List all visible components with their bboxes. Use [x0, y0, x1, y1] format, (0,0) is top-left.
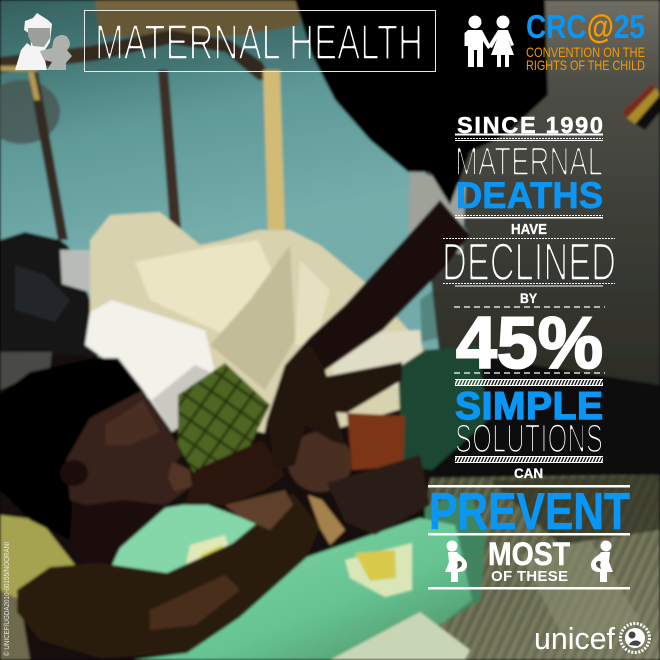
title box — [84, 10, 436, 72]
CRC@25 logo text: CRC@25 — [526, 8, 645, 45]
base shadow under lower scene — [0, 350, 660, 660]
icon: pregnant woman right — [591, 540, 613, 582]
icon: pregnant woman left — [445, 540, 467, 582]
title: Maternal Health: MATERNAL HEALTH — [95, 16, 423, 70]
deaths: DEATHS — [456, 175, 603, 216]
of these: OF THESE — [491, 568, 568, 585]
can: CAN — [514, 465, 543, 481]
bag — [0, 232, 100, 400]
baby and hands — [288, 432, 352, 492]
striped sheet — [300, 475, 660, 660]
linen — [90, 212, 430, 440]
unicef wordmark: unicef — [534, 621, 615, 656]
have: HAVE — [511, 221, 547, 238]
icon: mother holding baby — [15, 13, 72, 70]
most: MOST — [488, 536, 570, 572]
icon: boy and girl holding hands — [464, 16, 514, 67]
headline text column — [428, 112, 630, 590]
simple: SIMPLE — [455, 385, 603, 428]
45 percent: 45% — [456, 303, 603, 384]
nurse head — [295, 0, 548, 205]
mother — [60, 495, 180, 572]
since 1990: SINCE 1990 — [457, 112, 603, 138]
photo credit: © UNICEF/UGDA2010-00155/NOORANI — [3, 542, 11, 656]
CRC@25 logo text — [526, 8, 645, 73]
towel and checked cloth — [178, 363, 270, 475]
icon: unicef emblem — [620, 624, 650, 652]
nurse uniform — [400, 0, 660, 400]
by: BY — [520, 290, 538, 306]
